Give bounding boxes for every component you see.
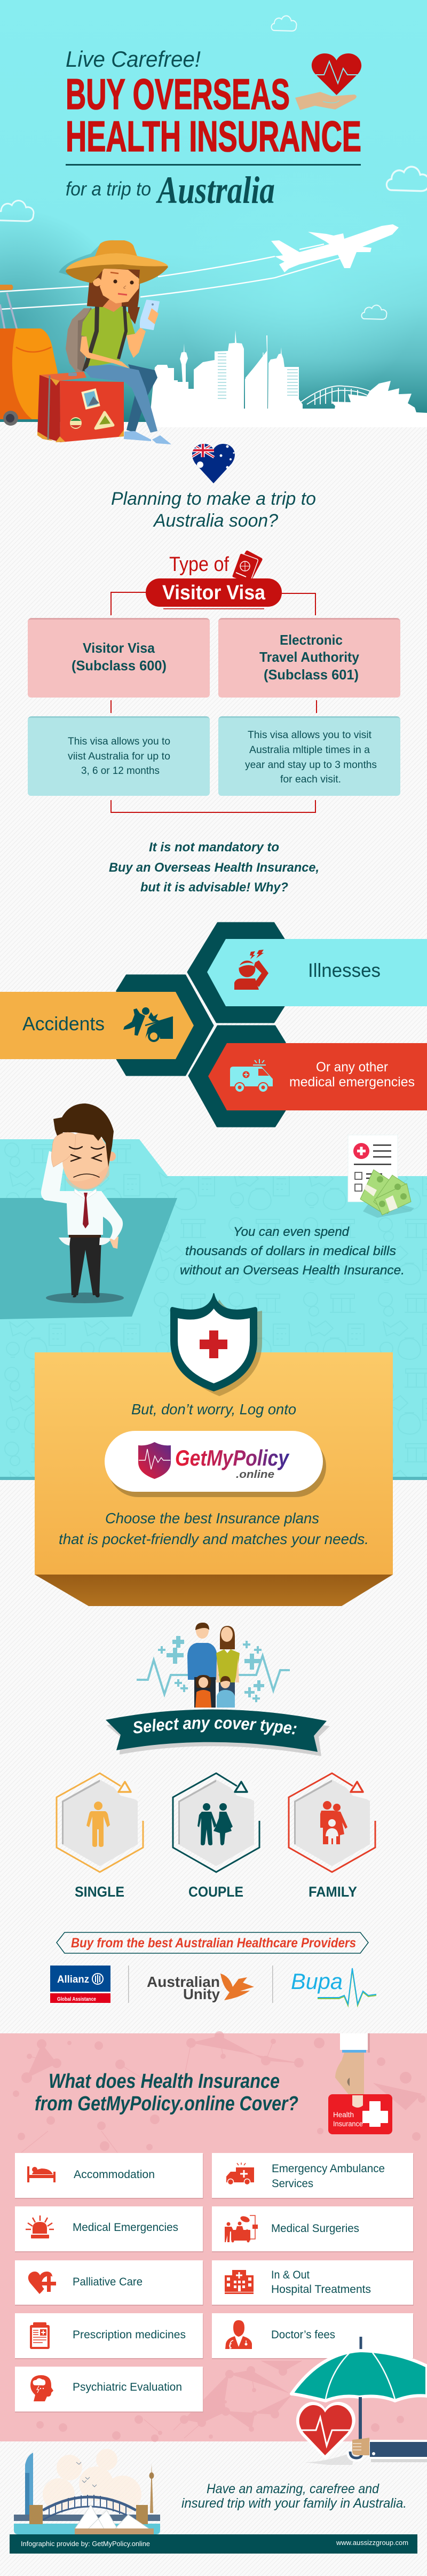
logo: bupa: Bupa xyxy=(291,1969,343,1994)
card: medical surgeries xyxy=(212,2206,414,2252)
card: psychiatric evaluation: Psychiatric Evaluation xyxy=(73,2381,182,2393)
item: illnesses xyxy=(188,923,427,1022)
straps xyxy=(84,306,97,371)
title xyxy=(66,46,361,212)
neck xyxy=(102,299,122,312)
card: emergency ambulance services: Emergency Ambulance xyxy=(272,2163,385,2175)
panel: visa 600 description: viist Australia for up to xyxy=(68,751,170,762)
item: other medical emergencies: medical emergencies xyxy=(289,1075,415,1090)
panel: medical bills xyxy=(0,1103,427,1480)
item: accidents: Accidents xyxy=(22,1013,105,1035)
hat xyxy=(94,240,137,257)
shadow under hat xyxy=(59,243,101,280)
logo: allianz: Global Assistance xyxy=(57,1996,96,2002)
footer bar: Infographic provide by: GetMyPolicy.online xyxy=(21,2540,150,2548)
banner: best providers: Buy from the best Australian Healthcare Providers xyxy=(71,1936,356,1951)
card: palliative care xyxy=(15,2260,203,2306)
banner: select cover type xyxy=(106,1709,330,1756)
card: in and out hospital treatments xyxy=(212,2260,414,2306)
face xyxy=(100,268,140,303)
icon: airplane xyxy=(271,224,399,272)
heading: type of visitor visa xyxy=(146,550,282,609)
footer bar xyxy=(10,2534,417,2554)
text: medical bills: thousands of dollars in medical bills xyxy=(185,1244,396,1258)
icon: phone xyxy=(140,300,159,330)
card: prescription medicines xyxy=(15,2313,203,2359)
heading: planning xyxy=(111,489,316,531)
heading: what does it cover xyxy=(35,2070,298,2115)
card: medical emergencies xyxy=(15,2206,203,2252)
heading: type of visitor visa: Visitor Visa xyxy=(162,582,266,604)
jeans front leg xyxy=(84,365,157,433)
heading: planning: Planning to make a trip to xyxy=(111,489,316,509)
title: for a trip to xyxy=(66,178,151,200)
illustration: family and pulse xyxy=(137,1623,290,1708)
banner: select cover type: Select any cover type: xyxy=(133,1718,297,1736)
icon: ambulance xyxy=(230,1059,273,1092)
icon: passport xyxy=(232,550,263,584)
card: emergency ambulance services xyxy=(212,2153,414,2199)
icon: person xyxy=(86,1802,110,1847)
banner: best providers xyxy=(57,1932,368,1953)
item: family cover xyxy=(289,1773,375,1900)
panel: visa 600 description: 3, 6 or 12 months xyxy=(81,765,160,777)
panel: visitor visa 600: (Subclass 600) xyxy=(72,657,167,674)
icon: clipboard xyxy=(30,2322,50,2349)
icon: siren xyxy=(26,2215,54,2238)
text: medical bills: without an Overseas Health Insurance. xyxy=(180,1263,405,1278)
title: Live Carefree! xyxy=(66,46,201,72)
icon: couple xyxy=(197,1803,233,1845)
card: accommodation: Accommodation xyxy=(74,2168,155,2181)
logo: australian unity xyxy=(147,1974,254,2002)
card: in and out hospital treatments: Hospital Treatments xyxy=(271,2283,371,2296)
contrails xyxy=(0,244,343,309)
illustration: hand holding health kit: Insurance xyxy=(333,2120,363,2128)
illustration: hand holding health kit xyxy=(328,2033,392,2134)
illustration: sydney harbour xyxy=(14,2449,160,2534)
card: medical surgeries: Medical Surgeries xyxy=(271,2222,359,2235)
card: doctor's fees: Doctor’s fees xyxy=(271,2329,335,2341)
icon: australian flag heart xyxy=(192,444,235,483)
panel: getmypolicy box: Choose the best Insurance plans xyxy=(105,1510,319,1526)
item: couple cover: COUPLE xyxy=(188,1884,243,1900)
illustration: umbrella, heart and hand xyxy=(291,2337,427,2465)
text: medical bills: You can even spend xyxy=(233,1225,350,1239)
item: other medical emergencies: Or any other xyxy=(316,1060,388,1075)
panel: electronic travel authority 601: (Subclass 601) xyxy=(264,667,359,683)
icon: ambulance xyxy=(226,2163,254,2184)
panel: visitor visa 600 xyxy=(28,618,210,698)
text: not mandatory xyxy=(109,840,319,895)
text: not mandatory: but it is advisable! Why? xyxy=(140,880,288,895)
text: medical bills xyxy=(180,1225,405,1278)
panel: getmypolicy box: But, don’t worry, Log onto xyxy=(131,1401,296,1418)
illustration: hand holding health kit: Health xyxy=(333,2111,354,2119)
heading: type of visitor visa: Type of xyxy=(169,553,229,576)
shirt xyxy=(81,306,135,367)
jeans back leg xyxy=(126,364,157,433)
panel: getmypolicy box: that is pocket-friendly and matches your needs. xyxy=(59,1531,369,1547)
text: not mandatory: It is not mandatory to xyxy=(149,840,279,855)
item: illnesses: Illnesses xyxy=(308,959,381,981)
hair left xyxy=(87,269,109,307)
logo: bupa xyxy=(291,1968,376,2006)
icon: family xyxy=(320,1801,347,1844)
card: emergency ambulance services: Services xyxy=(272,2178,313,2190)
logo: allianz: Allianz xyxy=(57,1974,89,1985)
icon: surgery xyxy=(225,2215,258,2242)
card: in and out hospital treatments: In & Out xyxy=(271,2269,310,2281)
icon: head with storm cloud xyxy=(30,2375,53,2401)
card: psychiatric evaluation xyxy=(15,2367,203,2413)
panel: visa 601 description: This visa allows you to visit xyxy=(248,730,372,741)
icon: hospital xyxy=(225,2270,254,2294)
logo: getmypolicy pill: GetMyPolicy xyxy=(175,1445,290,1470)
icon: heart plus xyxy=(28,2272,57,2294)
text: closing message: Have an amazing, carefree and xyxy=(207,2481,379,2496)
card: medical emergencies: Medical Emergencies xyxy=(73,2221,178,2234)
connectors xyxy=(111,592,317,812)
skyline xyxy=(149,330,427,427)
panel: visa 601 description: year and stay up to 3 months xyxy=(245,760,377,771)
shoes xyxy=(124,431,151,441)
suitcase: orange xyxy=(0,285,60,426)
icon: headache xyxy=(234,950,268,990)
panel: getmypolicy box xyxy=(35,1294,393,1606)
illustration: traveller girl with suitcases xyxy=(0,240,171,444)
heading: planning: Australia soon? xyxy=(153,511,278,531)
backpack xyxy=(66,308,92,372)
icon: shield xyxy=(171,1294,262,1396)
logo: australian unity: Unity xyxy=(183,1986,220,2002)
heading: what does it cover: What does Health Insurance xyxy=(49,2070,280,2093)
icon: car accident xyxy=(123,1007,173,1041)
panel: header xyxy=(0,0,427,444)
icon: bed xyxy=(27,2166,56,2182)
icon: heart with pulse xyxy=(296,2402,355,2459)
item: other medical emergencies xyxy=(189,1026,427,1126)
suitcase: red xyxy=(37,372,124,442)
logo: allianz xyxy=(50,1966,110,2003)
illustration: worried man xyxy=(41,1103,123,1297)
icon: medical bill and money xyxy=(348,1135,414,1218)
logo: australian unity: Australian xyxy=(147,1974,220,1990)
panel: visa 600 description: This visa allows you to xyxy=(68,736,170,747)
logo: getmypolicy pill xyxy=(105,1431,326,1497)
footer bar: www.aussizzgroup.com xyxy=(336,2539,408,2547)
panel: electronic travel authority 601: Electronic xyxy=(280,632,343,648)
chart: reasons hexagons xyxy=(0,923,427,1126)
logo: getmypolicy pill: .online xyxy=(236,1469,274,1481)
text: closing message: insured trip with your family in Australia. xyxy=(181,2496,407,2511)
panel: visa 601 description: for each visit. xyxy=(280,774,341,785)
hair back xyxy=(87,267,140,324)
card: doctor's fees xyxy=(212,2313,414,2359)
panel: visa 601 description xyxy=(218,716,400,796)
panel: visa 600 description xyxy=(28,716,210,796)
icon: heart in hand xyxy=(295,53,361,110)
text: closing message xyxy=(181,2481,407,2511)
panel: electronic travel authority 601 xyxy=(218,618,400,698)
item: accidents xyxy=(0,975,213,1075)
panel: visitor visa 600: Visitor Visa xyxy=(83,640,155,656)
title: BUY OVERSEAS xyxy=(66,71,290,119)
item: single cover: SINGLE xyxy=(75,1884,124,1900)
item: single cover xyxy=(57,1773,143,1900)
text: not mandatory: Buy an Overseas Health Insurance, xyxy=(109,860,319,875)
heading: what does it cover: from GetMyPolicy.online Cover? xyxy=(35,2093,298,2115)
hair right xyxy=(129,269,140,280)
card: palliative care: Palliative Care xyxy=(73,2276,143,2288)
card: accommodation xyxy=(15,2153,203,2199)
card: prescription medicines: Prescription medicines xyxy=(73,2329,186,2341)
icon: clouds xyxy=(0,16,427,319)
panel: electronic travel authority 601: Travel Authority xyxy=(259,649,360,665)
panel: coverage xyxy=(0,2031,427,2442)
item: couple cover xyxy=(173,1773,259,1900)
title: Australia xyxy=(156,169,275,212)
decoration: molecule network xyxy=(13,2031,425,2442)
item: family cover: FAMILY xyxy=(309,1884,357,1900)
arms xyxy=(80,336,130,369)
panel: visa 601 description: Australia mltiple times in a xyxy=(249,745,370,756)
icon: doctor xyxy=(225,2320,252,2349)
